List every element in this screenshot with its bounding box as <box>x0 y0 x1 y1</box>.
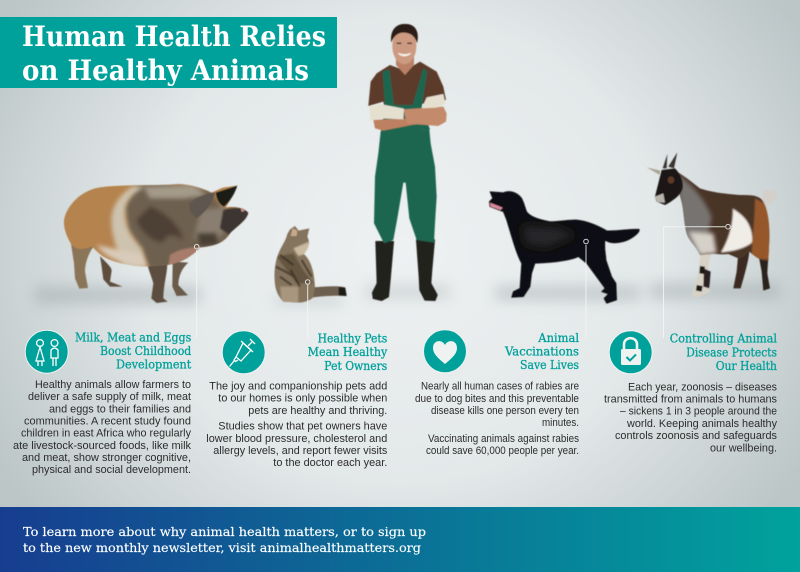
body text: deliver a safe supply of milk, meat <box>28 391 191 403</box>
icon: syringe <box>222 331 265 374</box>
body text: allergy levels, and report fewer visits <box>213 445 388 457</box>
connector lines <box>194 224 730 338</box>
title banner <box>0 17 337 88</box>
shirt <box>368 62 446 112</box>
body text: ate livestock-sourced foods, like milk <box>13 440 192 452</box>
photo: goat <box>647 152 777 298</box>
heading: Healthy Pets <box>318 332 387 346</box>
body text: world. Keeping animals healthy <box>626 418 778 430</box>
body text: communities. A recent study found <box>24 416 191 428</box>
body text: physical and social development. <box>32 464 191 476</box>
body text: our wellbeing. <box>710 442 777 454</box>
body text: – sickens 1 in 3 people around the <box>620 406 777 418</box>
heading <box>75 330 192 372</box>
footer banner: to the new monthly newsletter, visit animalhealthmatters.org <box>23 540 421 555</box>
heading: Save Lives <box>520 358 579 372</box>
footer banner <box>0 507 800 572</box>
heading: Our Health <box>716 359 777 373</box>
photo: dog <box>489 191 639 303</box>
heading: Disease Protects <box>686 346 777 360</box>
body text: transmitted from animals to humans <box>604 394 778 406</box>
body text <box>604 382 778 454</box>
heading: Controlling Animal <box>670 332 777 346</box>
body text: to the doctor each year. <box>273 457 387 469</box>
body text: Each year, zoonosis – diseases <box>628 382 778 394</box>
body text: to our homes is only possible when <box>218 393 387 405</box>
heading: Boost Childhood <box>100 344 192 358</box>
body text: disease kills one person every ten <box>431 405 579 417</box>
heading <box>504 331 579 372</box>
body text: Studies show that pet owners have <box>218 420 387 432</box>
boots <box>373 240 437 300</box>
photo: cat <box>270 223 347 307</box>
body text: pets are healthy and thriving. <box>248 405 387 417</box>
photo: pig <box>60 180 253 303</box>
icon: children <box>25 330 68 373</box>
title banner: Human Health Relies <box>22 20 326 53</box>
body text: and eggs to their families and <box>49 403 191 415</box>
overalls <box>374 129 437 243</box>
body text: lower blood pressure, cholesterol and <box>206 433 387 445</box>
bib and straps <box>381 68 430 133</box>
icon: heart <box>424 330 466 373</box>
body text: Vaccinating animals against rabies <box>428 433 580 445</box>
body text <box>206 380 388 469</box>
body text: minutes. <box>542 417 579 429</box>
heading: Mean Healthy <box>308 345 387 359</box>
heading: Vaccinations <box>504 344 579 358</box>
heading <box>670 332 777 373</box>
body text: The joy and companionship pets add <box>209 380 387 392</box>
panel: controlling animal disease <box>604 331 778 454</box>
body text: Healthy animals allow farmers to <box>35 379 191 391</box>
body text: Nearly all human cases of rabies are <box>421 380 579 392</box>
photo: farmer <box>368 24 447 300</box>
heading <box>308 332 387 373</box>
heading: Animal <box>537 331 579 345</box>
body text: could save 60,000 people per year. <box>426 445 579 457</box>
icon: padlock <box>609 331 652 374</box>
heading: Pet Owners <box>324 359 387 373</box>
body text <box>13 379 192 476</box>
body text <box>415 380 580 457</box>
ground shadows <box>35 283 780 304</box>
body text: and meat, show stronger cognitive, <box>22 452 191 464</box>
heading: Milk, Meat and Eggs <box>75 330 191 344</box>
body text: due to dog bites and this preventable <box>415 393 579 405</box>
panel: animal vaccinations <box>415 330 580 457</box>
heading: Development <box>116 358 191 372</box>
arms <box>373 118 423 131</box>
neck and head <box>396 55 414 75</box>
title banner: on Healthy Animals <box>22 54 309 87</box>
body text: controls zoonosis and safeguards <box>615 430 778 442</box>
gloves <box>369 104 404 121</box>
body text: children in east Africa who regularly <box>21 428 192 440</box>
panel: healthy pets <box>206 331 388 469</box>
panel: milk, meat and eggs <box>13 330 192 476</box>
footer banner: To learn more about why animal health matters, or to sign up <box>23 524 426 539</box>
